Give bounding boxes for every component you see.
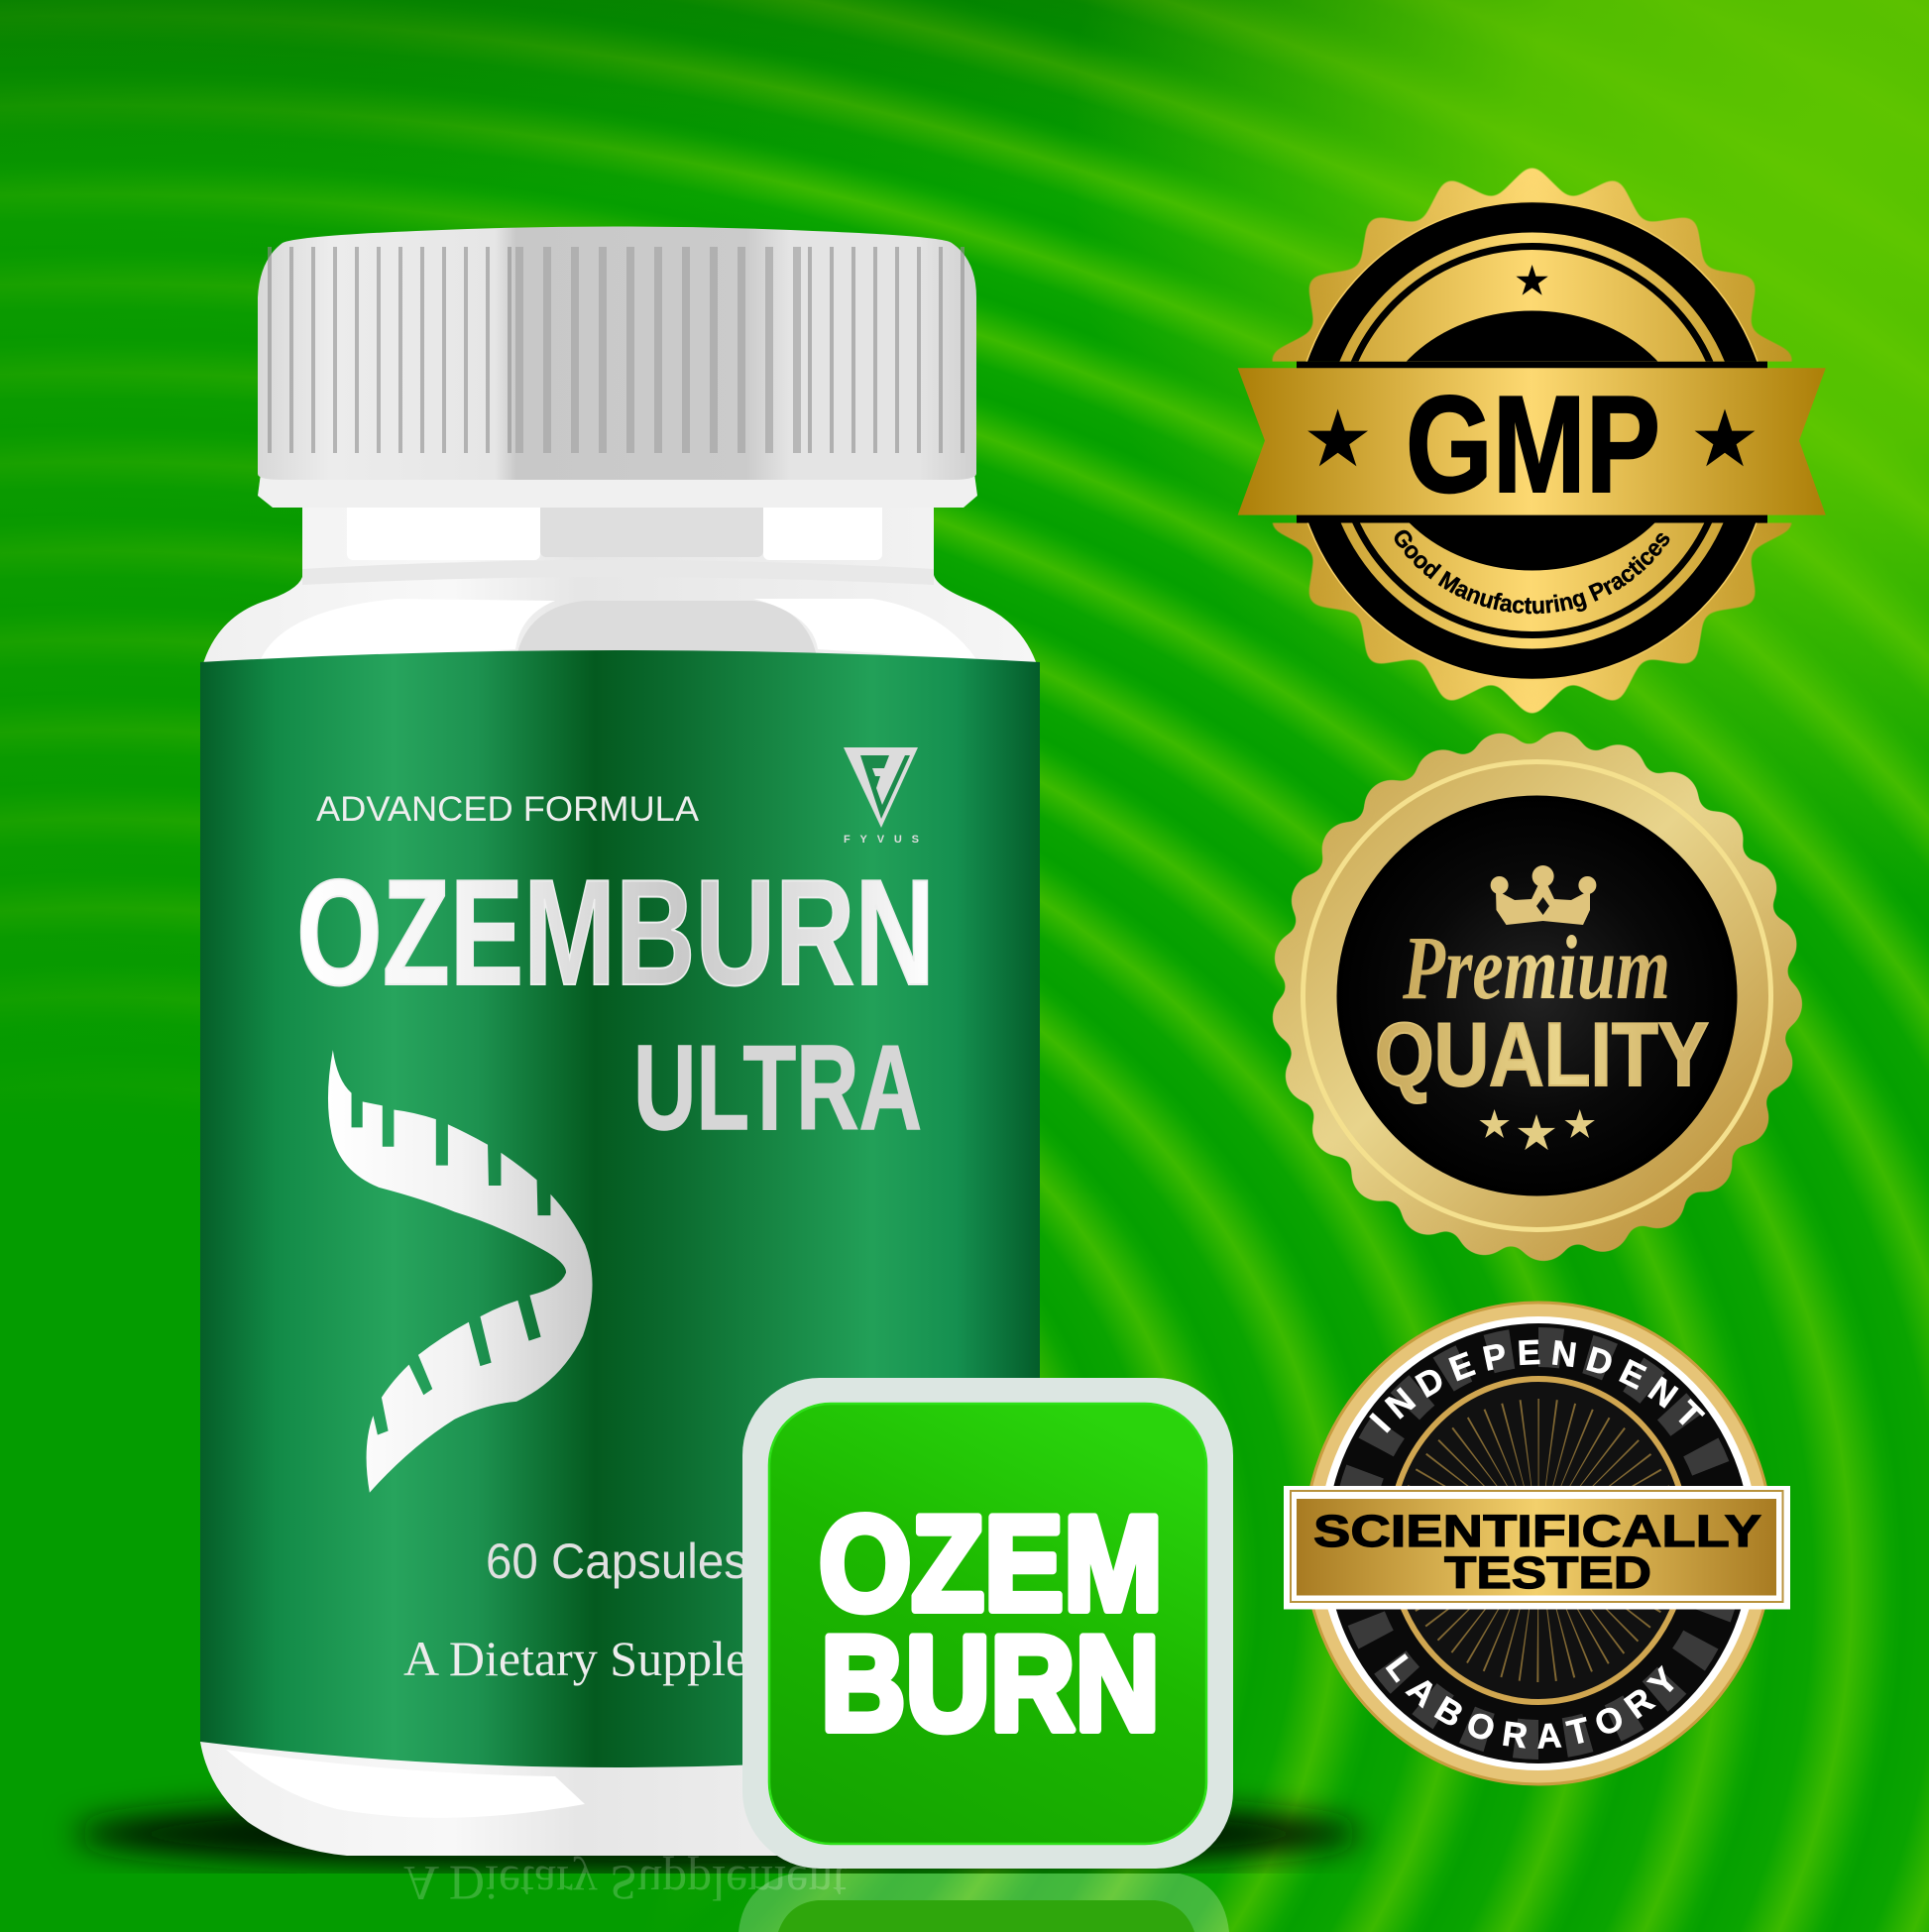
label text: advanced formula: ADVANCED FORMULA bbox=[316, 790, 700, 829]
floor shadow bbox=[74, 1796, 1363, 1872]
GMP ribbon star left bbox=[1307, 408, 1368, 466]
reflection of the bottle text and box: A Dietary Supplement bbox=[403, 1856, 847, 1911]
reflection of the bottle text and box bbox=[403, 1856, 1229, 1932]
GMP ribbon star right bbox=[1695, 408, 1755, 466]
badge: Independent Laboratory bbox=[1284, 1301, 1790, 1786]
GMP rings bbox=[1294, 202, 1771, 680]
green label bbox=[200, 650, 1040, 1767]
app icon box: OZEM BURN bbox=[742, 1378, 1233, 1869]
box text: OZEM: OZEM bbox=[819, 1488, 1163, 1639]
cap ring bbox=[258, 466, 977, 508]
bottle cap bbox=[258, 226, 976, 480]
product name: ULTRA: ULTRA bbox=[633, 1020, 922, 1155]
lab outer gold ring bbox=[1305, 1303, 1772, 1784]
GMP scalloped gold seal bbox=[1255, 163, 1810, 718]
GMP title: GMP bbox=[1406, 368, 1660, 521]
lab text: independent: INDEPENDENT bbox=[1369, 1340, 1705, 1433]
bottle body bbox=[200, 496, 1040, 1856]
badge: GMP bbox=[1237, 168, 1826, 714]
GMP top star bbox=[1516, 265, 1548, 295]
icon: crown bbox=[1491, 865, 1596, 925]
label text: dietary supplement: A Dietary Supplement bbox=[403, 1631, 847, 1686]
banner text: scientifically: SCIENTIFICALLY bbox=[1313, 1506, 1761, 1556]
lab text: laboratory: LABORATORY bbox=[1386, 1653, 1674, 1749]
GMP black ring strip behind ribbon bbox=[1297, 362, 1767, 523]
premium black centre bbox=[1336, 795, 1737, 1195]
label text: 60 capsules: 60 Capsules bbox=[486, 1534, 747, 1589]
icon: measuring tape bbox=[328, 1050, 593, 1493]
quality text: QUALITY bbox=[1375, 1005, 1709, 1105]
lab black ring bbox=[1326, 1323, 1751, 1763]
lab white ring bbox=[1318, 1316, 1759, 1770]
premium metal ring bbox=[1303, 761, 1770, 1229]
GMP curved caption: Good Manufacturing Practices bbox=[1394, 529, 1669, 615]
icon: FYVUS logo: FYVUS bbox=[844, 834, 919, 846]
box text: BURN: BURN bbox=[821, 1608, 1160, 1759]
product bottle bbox=[200, 226, 1040, 1856]
lab centre with rays bbox=[1390, 1379, 1687, 1702]
premium stars bbox=[1479, 1109, 1595, 1150]
premium script text: Premium bbox=[1402, 917, 1670, 1018]
product name: OZEMBURN: OZEMBURN bbox=[296, 849, 935, 1017]
premium scalloped seal bbox=[1285, 743, 1788, 1247]
badge: Premium Quality bbox=[1285, 743, 1788, 1247]
lab banner bbox=[1284, 1486, 1790, 1610]
icon: FYVUS logo bbox=[844, 747, 919, 846]
GMP ribbon bbox=[1238, 368, 1826, 515]
banner text: tested: TESTED bbox=[1444, 1547, 1651, 1598]
bottle neck highlights bbox=[226, 496, 976, 1818]
lab ring segments bbox=[1352, 1347, 1725, 1740]
